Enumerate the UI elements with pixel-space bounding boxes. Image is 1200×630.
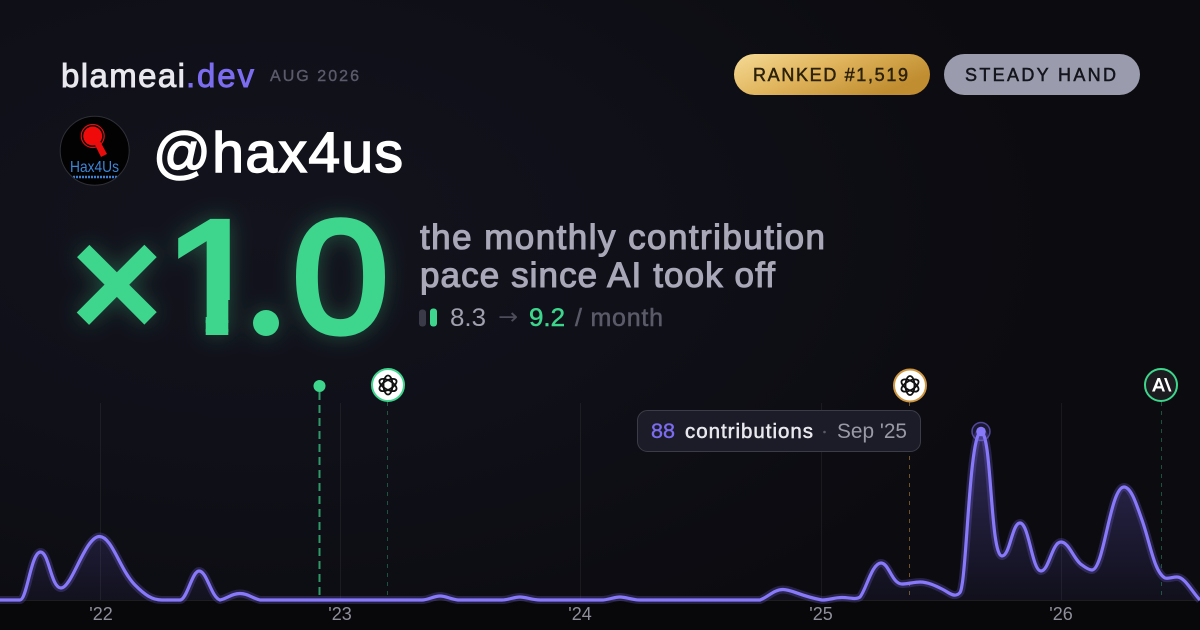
tooltip: Sep '25 <box>837 420 907 443</box>
marker line: model release 1 <box>386 402 388 600</box>
axis labels: '23 <box>328 604 352 624</box>
tooltip: contributions <box>685 420 813 443</box>
tagline: pace since AI took off <box>420 256 775 295</box>
badge: archetype: STEADY HAND <box>965 65 1116 85</box>
badge: rank <box>734 54 930 95</box>
area under curve <box>0 432 1200 600</box>
year gridlines <box>0 403 1200 600</box>
brand logo: blameai <box>61 57 185 94</box>
pace stats: / month <box>575 304 663 332</box>
pace stats: 8.3 <box>450 304 486 332</box>
axis labels: '24 <box>568 604 592 624</box>
axis labels: '26 <box>1049 604 1073 624</box>
date label: AUG 2026 <box>270 68 359 85</box>
chart: monthly contributions <box>0 369 1200 630</box>
curve glow <box>0 432 1200 600</box>
tooltip <box>638 410 920 452</box>
avatar <box>60 116 129 185</box>
marker line: model release 3 <box>1160 402 1162 600</box>
axis labels: '25 <box>809 604 833 624</box>
username: @hax4us <box>153 121 403 185</box>
headline multiplier: × <box>70 193 163 372</box>
brand logo <box>61 57 254 94</box>
tooltip: 88 <box>651 420 675 443</box>
icon: OpenAI, orange ring <box>894 370 926 402</box>
icon: Anthropic <box>1145 369 1177 401</box>
badge: rank: RANKED #1,519 <box>753 65 908 85</box>
avatar: Hax4Us <box>70 159 119 176</box>
headline multiplier: . <box>236 138 297 384</box>
curve line <box>0 432 1200 600</box>
headline multiplier: 1 <box>164 187 266 366</box>
icon: OpenAI, green ring <box>372 369 404 401</box>
icon: before/after bars <box>419 308 437 326</box>
brand logo: .dev <box>186 57 254 94</box>
peak marker <box>972 422 990 440</box>
headline multiplier <box>72 206 396 347</box>
tagline: the monthly contribution <box>420 218 825 257</box>
tagline <box>420 218 825 295</box>
AI takeoff marker <box>314 380 326 600</box>
pace stats: → <box>498 305 518 330</box>
axis labels: '22 <box>89 604 113 624</box>
pace stats: 9.2 <box>529 304 565 332</box>
axis labels <box>89 604 1073 624</box>
badge: archetype <box>944 54 1140 95</box>
pace stats <box>419 304 663 332</box>
marker line: model release 2 <box>908 402 910 600</box>
headline multiplier: 0 <box>292 187 388 366</box>
